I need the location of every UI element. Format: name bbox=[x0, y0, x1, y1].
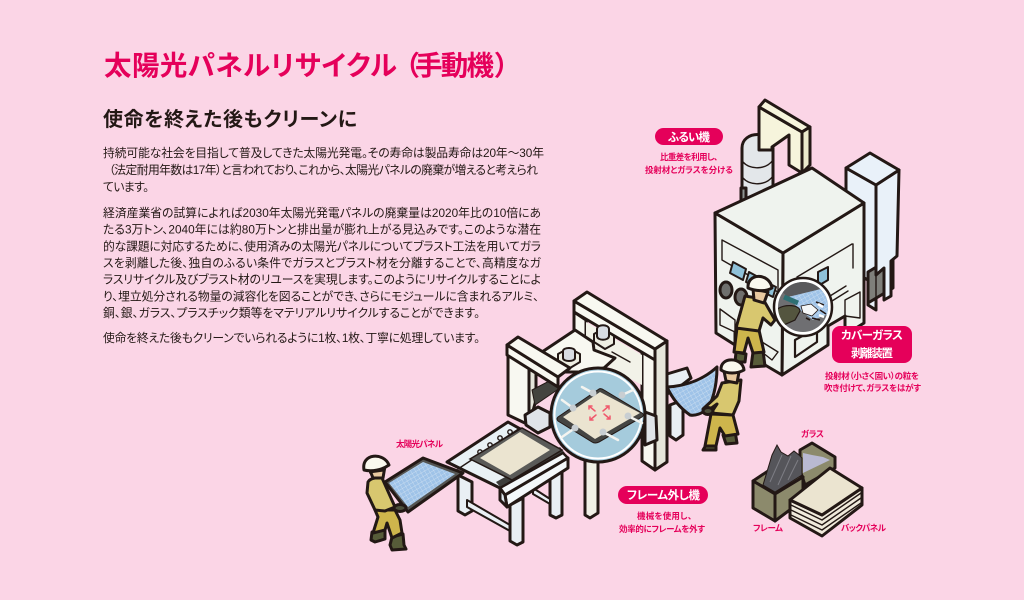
text block: intro: 持続可能な社会を目指して普及してきた太陽光発電。その寿命は製品寿命は20年～30年 bbox=[103, 146, 544, 160]
label: sieve machine: ふるい機 bbox=[668, 130, 710, 144]
label: cover glass peeler: カバーガラス bbox=[841, 328, 903, 342]
frame bin bbox=[753, 445, 803, 521]
text block: intro bbox=[103, 146, 544, 194]
illustration: frame removal machine bbox=[447, 292, 691, 545]
text block: details: 銅、銀、ガラス、プラスチック類等をマテリアルリサイクルすることができます。 bbox=[103, 306, 480, 320]
text block: details: たる3万トン、2040年には約80万トンと排出量が膨れ上がる見込みです。このような潜在 bbox=[103, 222, 541, 236]
text block: intro: ています。 bbox=[103, 180, 149, 194]
label: cover glass peeler: 吹き付けて、ガラスをはがす bbox=[824, 383, 921, 393]
front gantry bbox=[507, 337, 570, 425]
label: frame removal machine: 効率的にフレームを外す bbox=[619, 524, 705, 534]
label: cover glass peeler bbox=[824, 326, 921, 393]
machine body bbox=[715, 168, 864, 375]
label: frame: フレーム bbox=[753, 523, 784, 533]
title: ） bbox=[495, 50, 509, 81]
text block: closing: 使命を終えた後もクリーンでいられるように1枚、1枚、丁寧に処理しています。 bbox=[103, 331, 480, 345]
duct bbox=[759, 100, 810, 173]
text block: details bbox=[103, 206, 542, 320]
illustration: blast machine bbox=[715, 100, 899, 375]
label: cover glass peeler: 投射材（小さく固い）の粒を bbox=[825, 371, 919, 381]
heading: 使命を終えた後もクリーンに bbox=[103, 108, 357, 131]
text block: details: スを剥離した後、独自のふるい条件でガラスとブラスト材を分離することで、高精度なガ bbox=[103, 256, 542, 270]
label: cover glass peeler: 剥離装置 bbox=[851, 346, 894, 360]
label: sieve machine bbox=[645, 128, 733, 175]
lens: frame removal detail bbox=[551, 368, 645, 462]
label: frame removal machine: フレーム外し機 bbox=[627, 488, 700, 502]
conveyor table bbox=[447, 422, 568, 545]
text block: details: ラスリサイクル及びブラスト材のリユースを実現します。このようにリサイクルすることによ bbox=[103, 272, 541, 286]
title: （ bbox=[405, 50, 419, 81]
hopper tower bbox=[846, 153, 899, 310]
label: sieve machine: 比重差を利用し、 bbox=[660, 152, 718, 162]
label: frame removal machine: 機械を使用し、 bbox=[637, 511, 692, 521]
cross beams and motors bbox=[542, 325, 615, 372]
text block: intro: （法定耐用年数は17年）と言われており、これから、太陽光パネルの廃棄が増えると考えられ bbox=[109, 163, 538, 177]
label: glass: ガラス bbox=[801, 429, 824, 439]
under-lens leg bbox=[585, 455, 598, 518]
label: solar panel: 太陽光パネル bbox=[396, 439, 444, 449]
label: frame removal machine bbox=[618, 486, 708, 534]
far conveyor end bbox=[667, 368, 691, 440]
title: 太陽光パネルリサイクル bbox=[104, 50, 397, 81]
worker carrying solar panel bbox=[364, 456, 463, 550]
text block: details: り、埋立処分される物量の減容化を図ることができ、さらにモジュールに含まれるアルミ、 bbox=[103, 290, 539, 304]
text block: details: 経済産業省の試算によれば2030年太陽光発電パネルの廃棄量は2020年比の10倍にあ bbox=[103, 206, 541, 220]
worker at glass peeler bbox=[734, 276, 775, 367]
right clamp box bbox=[645, 412, 657, 445]
lens: glass blasting detail bbox=[774, 278, 832, 336]
label: sieve machine: 投射材とガラスを分ける bbox=[645, 165, 733, 175]
text block: details: 的な課題に対応するために、使用済みの太陽光パネルについてブラスト工法を用いてガラ bbox=[103, 240, 541, 254]
materials: bins and panel stack bbox=[753, 443, 862, 536]
back gantry bbox=[574, 292, 667, 470]
worker carrying curved panel bbox=[667, 360, 744, 450]
glass bin bbox=[800, 443, 835, 485]
clamp box bbox=[525, 407, 550, 433]
back panel stack bbox=[790, 468, 862, 536]
cyclone cylinder bbox=[741, 134, 773, 208]
label: back panel: バックパネル bbox=[841, 523, 887, 533]
title: 手動機 bbox=[415, 50, 494, 81]
